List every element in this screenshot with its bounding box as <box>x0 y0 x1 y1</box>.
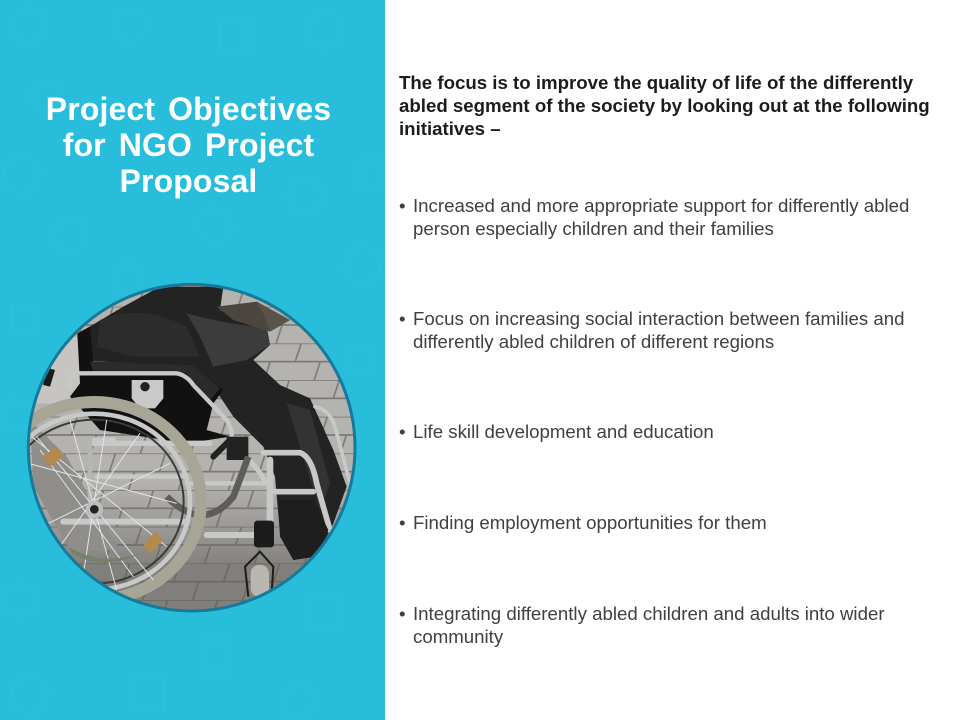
title: Project Objectives <box>46 91 331 127</box>
dark foot and castor <box>280 524 328 560</box>
intro text: abled segment of the society by looking out at the following <box>399 95 930 116</box>
panel: blue sidebar <box>0 0 385 720</box>
bullet: support: person especially children and their families <box>413 218 774 239</box>
circle border <box>28 284 355 611</box>
bullet: support: • <box>399 195 406 216</box>
bullet: integration: community <box>413 626 503 647</box>
intro text: initiatives – <box>399 118 501 139</box>
bullet: employment: • <box>399 512 406 533</box>
bullet: support: Increased and more appropriate support for differently abled <box>413 195 909 216</box>
left legs behind <box>30 420 120 550</box>
title: for NGO Project <box>63 127 314 163</box>
bullet: social interaction: • <box>399 308 406 329</box>
title: Proposal <box>120 163 257 199</box>
bullet: social interaction: differently abled children of different regions <box>413 331 774 352</box>
bullet: life skill: • <box>399 421 406 442</box>
bullet: social interaction: Focus on increasing social interaction between families and <box>413 308 905 329</box>
frame tubes <box>63 373 350 535</box>
bullet: integration: • <box>399 603 406 624</box>
intro text: The focus is to improve the quality of life of the differently <box>399 72 913 93</box>
body jacket <box>78 287 347 560</box>
chair backrest and armrest <box>70 327 230 443</box>
bullet: social interaction <box>399 308 905 352</box>
faint background icons <box>0 0 385 720</box>
bullet: integration: Integrating differently abled children and adults into wider <box>413 603 885 624</box>
big wheel <box>0 402 201 600</box>
bullet: life skill: Life skill development and education <box>413 421 714 442</box>
intro text <box>399 72 930 139</box>
photo: person in a wheelchair in a circle <box>26 282 356 612</box>
title <box>46 91 331 199</box>
bullet: integration <box>399 603 885 647</box>
bullet: support <box>399 195 909 239</box>
bullet: employment: Finding employment opportunities for them <box>413 512 767 533</box>
